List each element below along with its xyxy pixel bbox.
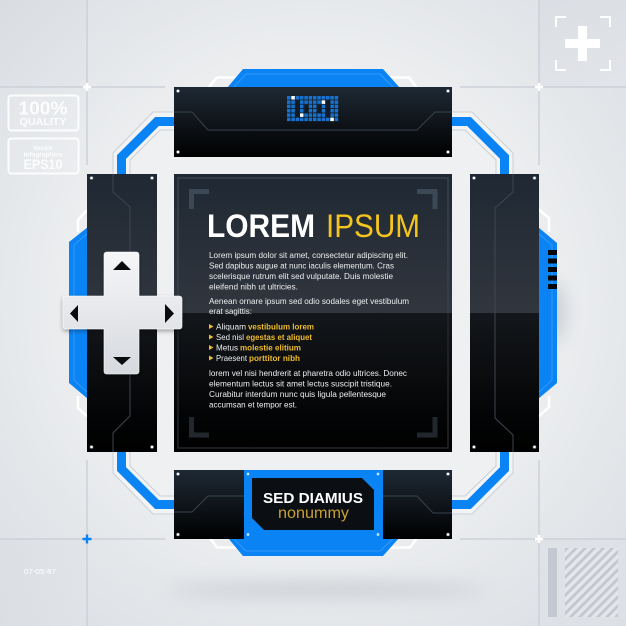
badge: EPS10 [8,138,78,174]
heading: LOREM [207,208,315,244]
bullet list: molestie elitium [240,342,301,352]
bullet list: egestas et aliquet [246,332,312,342]
bullet list: Aliquam [216,322,246,332]
icon: black bars [548,250,557,289]
label plate: SED DIAMIUS [263,490,363,507]
icon: pixel matrix [287,96,339,121]
intro paragraph: scelerisque rutrum elit sed vulputate. Duis molestie [209,271,393,281]
badge: EPS10: Vector [33,145,53,152]
bullet list: porttitor nibh [249,353,300,363]
floor shadow [165,583,485,597]
heading: IPSUM [326,208,420,244]
stripes block [548,548,618,617]
second paragraph: erat sagittis: [209,306,252,316]
octagon frame [113,112,513,514]
bullet list: vestibulum lorem [248,322,314,332]
badge: EPS10: infographics [23,152,63,158]
side shadow [545,282,563,342]
second paragraph: Aenean ornare ipsum sed odio sodales eget vestibulum [209,296,409,306]
bullet list: Metus [216,342,239,352]
top blue tab [208,69,417,88]
bullet list: Praesent [216,353,248,363]
crosshair markers [82,83,543,544]
arrows [70,261,174,365]
intro paragraph: Lorem ipsum dolor sit amet, consectetur adipiscing elit. [209,250,408,260]
closing paragraph: accumsan et tempor est. [209,400,297,410]
closing paragraph: elementum lectus sit amet lectus suscipit tristique. [209,378,392,388]
panel: bottom [174,470,452,539]
date stamp: 07-05-87 [24,567,56,576]
closing paragraph: Curabitur interdum nunc quis ligula pellentesque [209,389,386,399]
intro paragraph: eleifend nibh ut ultricies. [209,282,298,292]
left blue tab [69,209,88,417]
panel: top [174,87,452,157]
second paragraph [209,296,409,316]
badge: 100% quality [8,96,78,130]
bullet list [209,322,314,363]
bottom blue tab [210,538,417,556]
panel: left [87,174,157,452]
intro paragraph [209,250,408,292]
d-pad [63,252,182,374]
badge: 100% quality: QUALITY [20,116,66,128]
badge: 100% quality: 100% [18,98,68,118]
right blue tab [538,209,557,417]
panel: main text [174,174,452,452]
closing paragraph [209,368,408,410]
bullet list: Sed nisl [216,332,244,342]
icon: target plus [556,17,610,70]
label plate [244,470,383,539]
label plate: nonummy [278,505,349,522]
badge: EPS10: EPS10 [24,156,63,172]
closing paragraph: lorem vel nisi hendrerit at pharetra odio ultrices. Donec [209,368,408,378]
panel: right [470,174,539,452]
intro paragraph: Sed dapibus augue at nunc iaculis elementum. Cras [209,260,395,270]
